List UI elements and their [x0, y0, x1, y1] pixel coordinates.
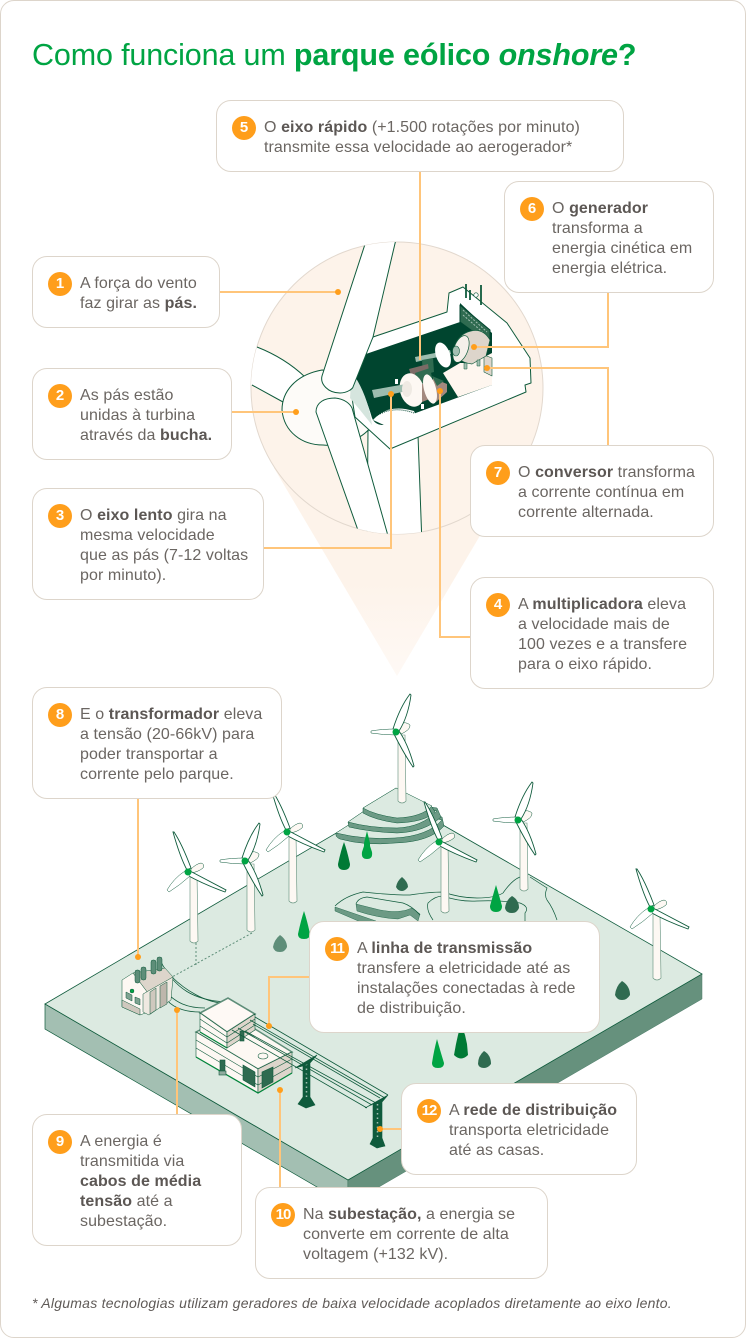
callout 4: a velocidade mais de: [518, 616, 670, 633]
callout 3: mesma velocidade: [80, 527, 215, 544]
callout 5: 5: [240, 119, 248, 136]
wind turbines: [167, 694, 689, 980]
upper blade: [322, 235, 397, 393]
control panel: [460, 305, 490, 344]
callout 12: A rede de distribuição: [449, 1102, 617, 1119]
wind farm ground: [45, 798, 702, 1205]
hub: [282, 370, 372, 445]
callout 4: [470, 577, 714, 689]
callout 12: [401, 1083, 637, 1175]
callout 12: 12: [422, 1102, 436, 1119]
trees and bushes: [273, 831, 630, 1068]
callout 9: [32, 1114, 242, 1246]
callout 3: O eixo lento gira na: [80, 507, 227, 524]
tower: [367, 430, 422, 545]
generator: [454, 330, 490, 364]
callout 10: Na subestação, a energia se: [303, 1206, 515, 1223]
callout 9: A energia é: [80, 1133, 162, 1150]
footnote: * Algumas tecnologias utilizam geradores de baixa velocidade acoplados diretamente ao eixo lento.: [32, 1295, 672, 1311]
callout 6: energia elétrica.: [552, 260, 667, 277]
transmission towers: [295, 1055, 388, 1148]
callout 3: que as pás (7-12 voltas: [80, 547, 248, 564]
callout 11: transfere a eletricidade até as: [357, 960, 570, 977]
roof instruments: [466, 284, 481, 305]
callout 8: corrente pelo parque.: [80, 766, 234, 783]
callout 7: [470, 445, 714, 537]
callout 6: 6: [528, 200, 536, 217]
callout 2: [32, 368, 232, 460]
callout 3: [32, 488, 264, 600]
callout 8: [32, 687, 282, 799]
callout 11: [309, 921, 600, 1033]
converter box: [484, 355, 492, 376]
transformer: [122, 957, 173, 1015]
callout 10: [255, 1187, 548, 1279]
callout 4: 100 vezes e a transfere: [518, 636, 687, 653]
callout 11: A linha de transmissão: [357, 940, 532, 957]
callout 5: O eixo rápido (+1.500 rotações por minuto): [264, 119, 580, 136]
callout 11: 11: [330, 940, 344, 957]
callout 2: As pás estão: [80, 387, 173, 404]
callout 8: 8: [56, 706, 64, 723]
callout 6: O generador: [552, 200, 648, 217]
callout 9: 9: [56, 1133, 64, 1150]
illustration: turbine detail and wind farm: [44, 172, 703, 1187]
slow shaft: [372, 384, 403, 398]
callout 9: cabos de média: [80, 1173, 201, 1190]
callout 8: poder transportar a: [80, 746, 218, 763]
transmission wires: [232, 1017, 388, 1108]
substation: [196, 998, 292, 1093]
nacelle floor: [443, 353, 492, 397]
callout 5: [216, 100, 624, 172]
callout 7: corrente alternada.: [518, 504, 654, 521]
callout 8: a tensão (20-66kV) para: [80, 726, 254, 743]
callout 2: através da bucha.: [80, 427, 212, 444]
callout 12: até as casas.: [449, 1142, 544, 1159]
callout 9: subestação.: [80, 1213, 167, 1230]
callout 7: O conversor transforma: [518, 464, 695, 481]
callout 9: tensão até a: [80, 1193, 173, 1210]
terrain contours: [335, 877, 557, 925]
callout 11: de distribuição.: [357, 1000, 466, 1017]
callout 11: instalações conectadas à rede: [357, 980, 575, 997]
turbine detail pin: [251, 242, 543, 676]
callout 10: converte em corrente de alta: [303, 1226, 509, 1243]
lower blade: [316, 398, 388, 534]
title: Como funciona um parque eólico onshore?: [32, 38, 636, 72]
callout 6: transforma a: [552, 220, 643, 237]
callout 7: 7: [494, 464, 502, 481]
callout 10: 10: [276, 1206, 290, 1223]
callout 10: voltagem (+132 kV).: [303, 1246, 448, 1263]
callout 5: transmite essa velocidade ao aerogerador*: [264, 139, 572, 156]
callout 3: 3: [56, 507, 64, 524]
fast shaft and brake disc: [415, 350, 451, 362]
callout 3: por minuto).: [80, 567, 166, 584]
callout 4: para o eixo rápido.: [518, 656, 652, 673]
callout 2: unidas à turbina: [80, 407, 195, 424]
callout 4: A multiplicadora eleva: [518, 596, 686, 613]
callout dots: [135, 289, 490, 1132]
callout 6: energia cinética em: [552, 240, 692, 257]
nacelle shell: [350, 287, 531, 449]
left blade: [251, 346, 304, 402]
gearbox: [409, 364, 429, 375]
callout 1: faz girar as pás.: [80, 295, 197, 312]
underground cable dashes: [172, 933, 252, 977]
nacelle interior: [352, 303, 492, 425]
callout 6: [504, 181, 714, 293]
glass spinner: [350, 379, 372, 425]
hill terraces: [336, 788, 444, 844]
turbine close-up: [251, 242, 532, 534]
callout lines: [138, 171, 608, 1188]
callout 8: E o transformador eleva: [80, 706, 262, 723]
callout 1: 1: [56, 275, 64, 292]
callout 2: 2: [56, 387, 64, 404]
callout 1: [32, 256, 220, 328]
callout 12: transporta eletricidade: [449, 1122, 609, 1139]
callout 1: A força do vento: [80, 275, 197, 292]
yaw ring: [373, 408, 416, 425]
medium-voltage cables: [160, 960, 225, 1012]
callout 4: 4: [494, 596, 502, 613]
callout 7: a corrente contínua em: [518, 484, 684, 501]
callout 9: transmitida via: [80, 1153, 184, 1170]
